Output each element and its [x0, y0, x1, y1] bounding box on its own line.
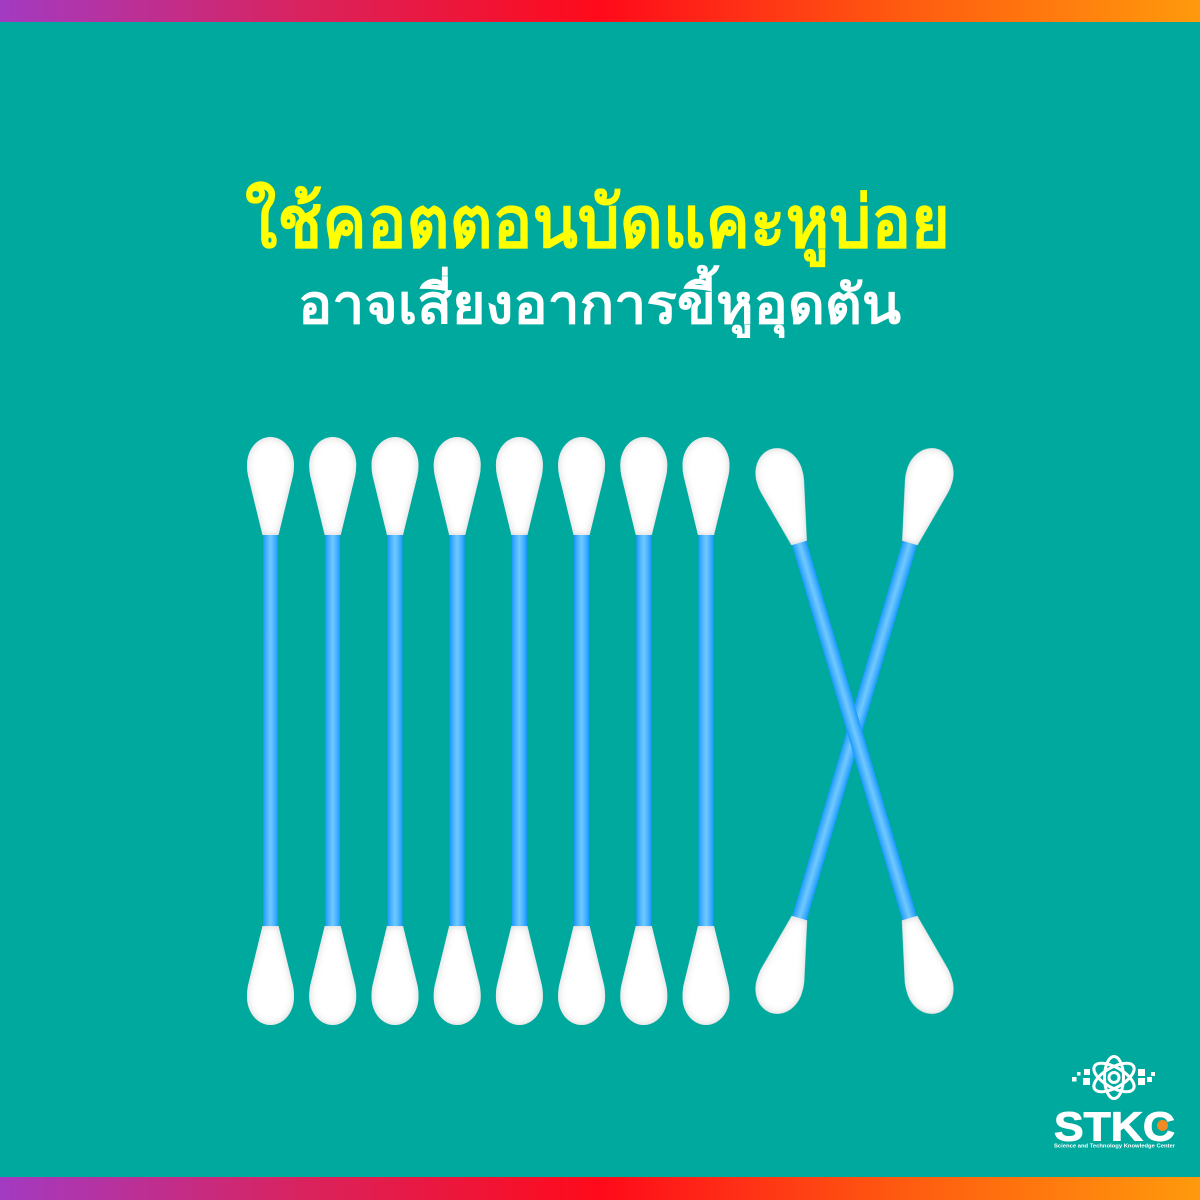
logo orange dot	[1157, 1120, 1168, 1131]
top gradient band	[0, 0, 1200, 22]
upright swabs row	[247, 437, 730, 1025]
crossed swabs	[749, 442, 960, 1020]
title line 2: อาจเสี่ยงอาการขี้หูอุดตัน	[298, 265, 901, 339]
logo pixel squares	[1072, 1069, 1155, 1085]
cotton swabs illustration	[247, 437, 960, 1025]
logo atom icon	[1090, 1056, 1138, 1098]
logo wordmark: STKC	[1054, 1104, 1175, 1150]
logo tagline: Science and Technology Knowledge Center	[1054, 1144, 1176, 1150]
bottom gradient band	[0, 1177, 1200, 1200]
title line 1: ใช้คอตตอนบัดแคะหูบ่อย	[245, 180, 950, 268]
STKC logo	[1054, 1056, 1176, 1150]
title	[245, 180, 950, 339]
